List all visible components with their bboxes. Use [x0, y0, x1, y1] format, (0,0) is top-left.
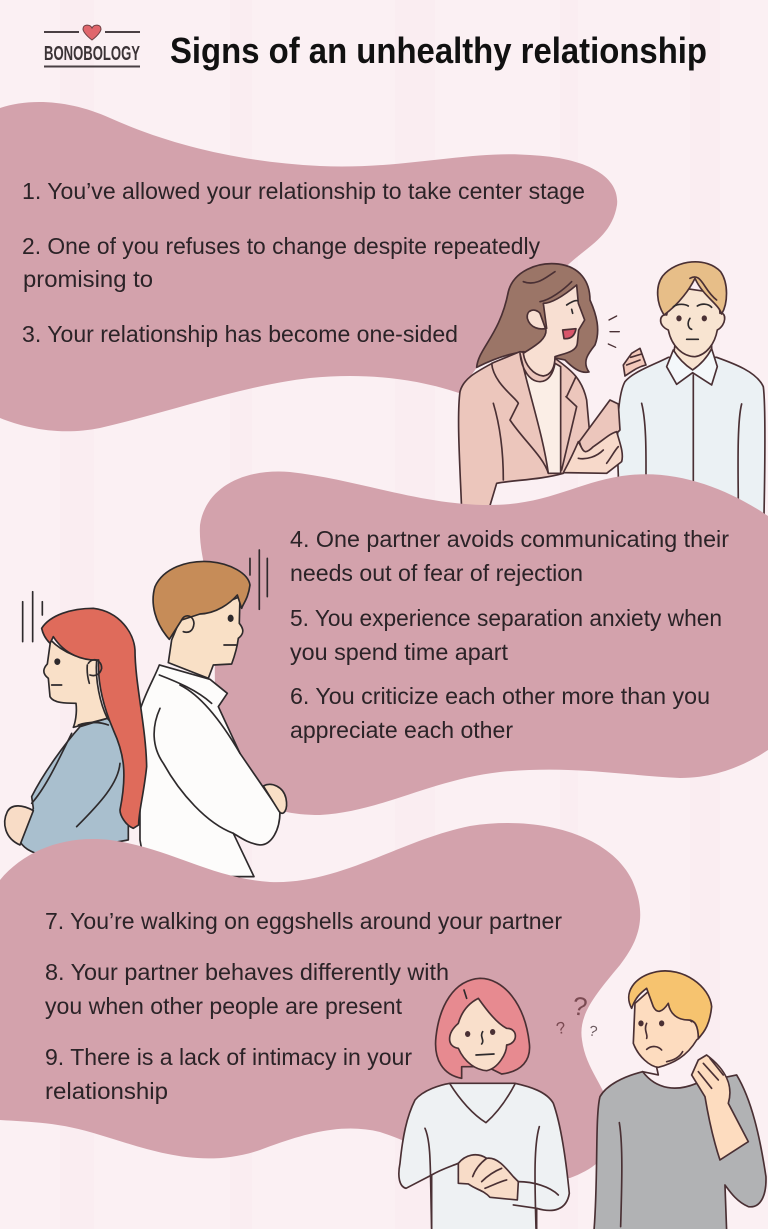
man face	[633, 990, 702, 1067]
woman mouth	[563, 329, 576, 339]
icon: heart	[83, 25, 101, 40]
text block: signs one to three	[22, 178, 585, 347]
text block: signs seven to nine: you when other people are present	[45, 993, 402, 1019]
panel: blob three	[0, 823, 640, 1178]
text block: signs one to three: 1. You’ve allowed your relationship to take center stage	[22, 178, 585, 204]
text block: signs seven to nine: 8. Your partner behaves differently with	[45, 959, 449, 985]
question marks: ?	[587, 1023, 599, 1041]
man arm and hand	[692, 1055, 748, 1160]
logo: BONOBOLOGY	[44, 43, 140, 65]
text block: signs four to six: 5. You experience separation anxiety when	[290, 605, 722, 631]
text block: signs four to six: appreciate each other	[290, 717, 513, 743]
panel: blob two	[200, 472, 768, 815]
woman hair	[477, 264, 598, 372]
man sweat lines	[250, 550, 267, 609]
text block: signs four to six: you spend time apart	[290, 639, 508, 665]
woman hair	[42, 608, 147, 828]
text block: signs one to three: 3. Your relationship has become one-sided	[22, 321, 458, 347]
text block: signs seven to nine: 9. There is a lack of intimacy in your	[45, 1044, 412, 1070]
woman hands	[458, 1155, 518, 1200]
man hair	[153, 561, 250, 639]
woman face	[44, 640, 107, 727]
text block: signs four to six: 6. You criticize each other more than you	[290, 683, 710, 709]
question marks: ?	[555, 1018, 567, 1038]
man neck and face	[168, 597, 243, 678]
question marks: ?	[571, 990, 589, 1022]
man hair	[658, 262, 727, 315]
question marks	[555, 990, 599, 1041]
woman hand	[5, 806, 33, 845]
illustration: arguing couple	[459, 262, 765, 517]
man hand on shoulder	[623, 348, 646, 376]
illustration: back to back couple	[5, 550, 287, 877]
shout marks	[608, 316, 619, 347]
man hair	[629, 971, 712, 1038]
text block: signs four to six: 4. One partner avoids communicating their	[290, 526, 729, 552]
text block: signs seven to nine	[45, 908, 562, 1104]
man head	[661, 287, 725, 357]
text block: signs four to six: needs out of fear of rejection	[290, 560, 583, 586]
man shirt	[140, 665, 280, 877]
text block: signs seven to nine: relationship	[45, 1078, 168, 1104]
man sweater	[594, 1072, 766, 1229]
man neck	[673, 345, 712, 373]
text block: signs four to six	[290, 526, 729, 743]
woman sweat lines	[23, 592, 42, 642]
illustration: confused couple	[399, 971, 766, 1229]
man body shirt	[617, 357, 765, 517]
man face	[673, 304, 712, 339]
man collar	[667, 349, 717, 385]
logo	[44, 25, 140, 66]
woman sweater	[399, 1083, 569, 1229]
woman face	[450, 998, 515, 1071]
woman shirt	[520, 353, 561, 473]
woman arm and hand	[579, 400, 620, 463]
man arm hand	[263, 784, 287, 813]
text block: signs one to three: 2. One of you refuses to change despite repeatedly	[22, 233, 540, 259]
title: Signs of an unhealthy relationship	[170, 30, 707, 71]
panel: blob one	[0, 102, 617, 431]
woman sweater	[20, 718, 128, 855]
woman hair	[436, 978, 530, 1078]
text block: signs seven to nine: 7. You’re walking on eggshells around your partner	[45, 908, 562, 934]
text block: signs one to three: promising to	[23, 266, 153, 292]
woman jacket	[459, 352, 590, 517]
woman face	[523, 285, 585, 376]
